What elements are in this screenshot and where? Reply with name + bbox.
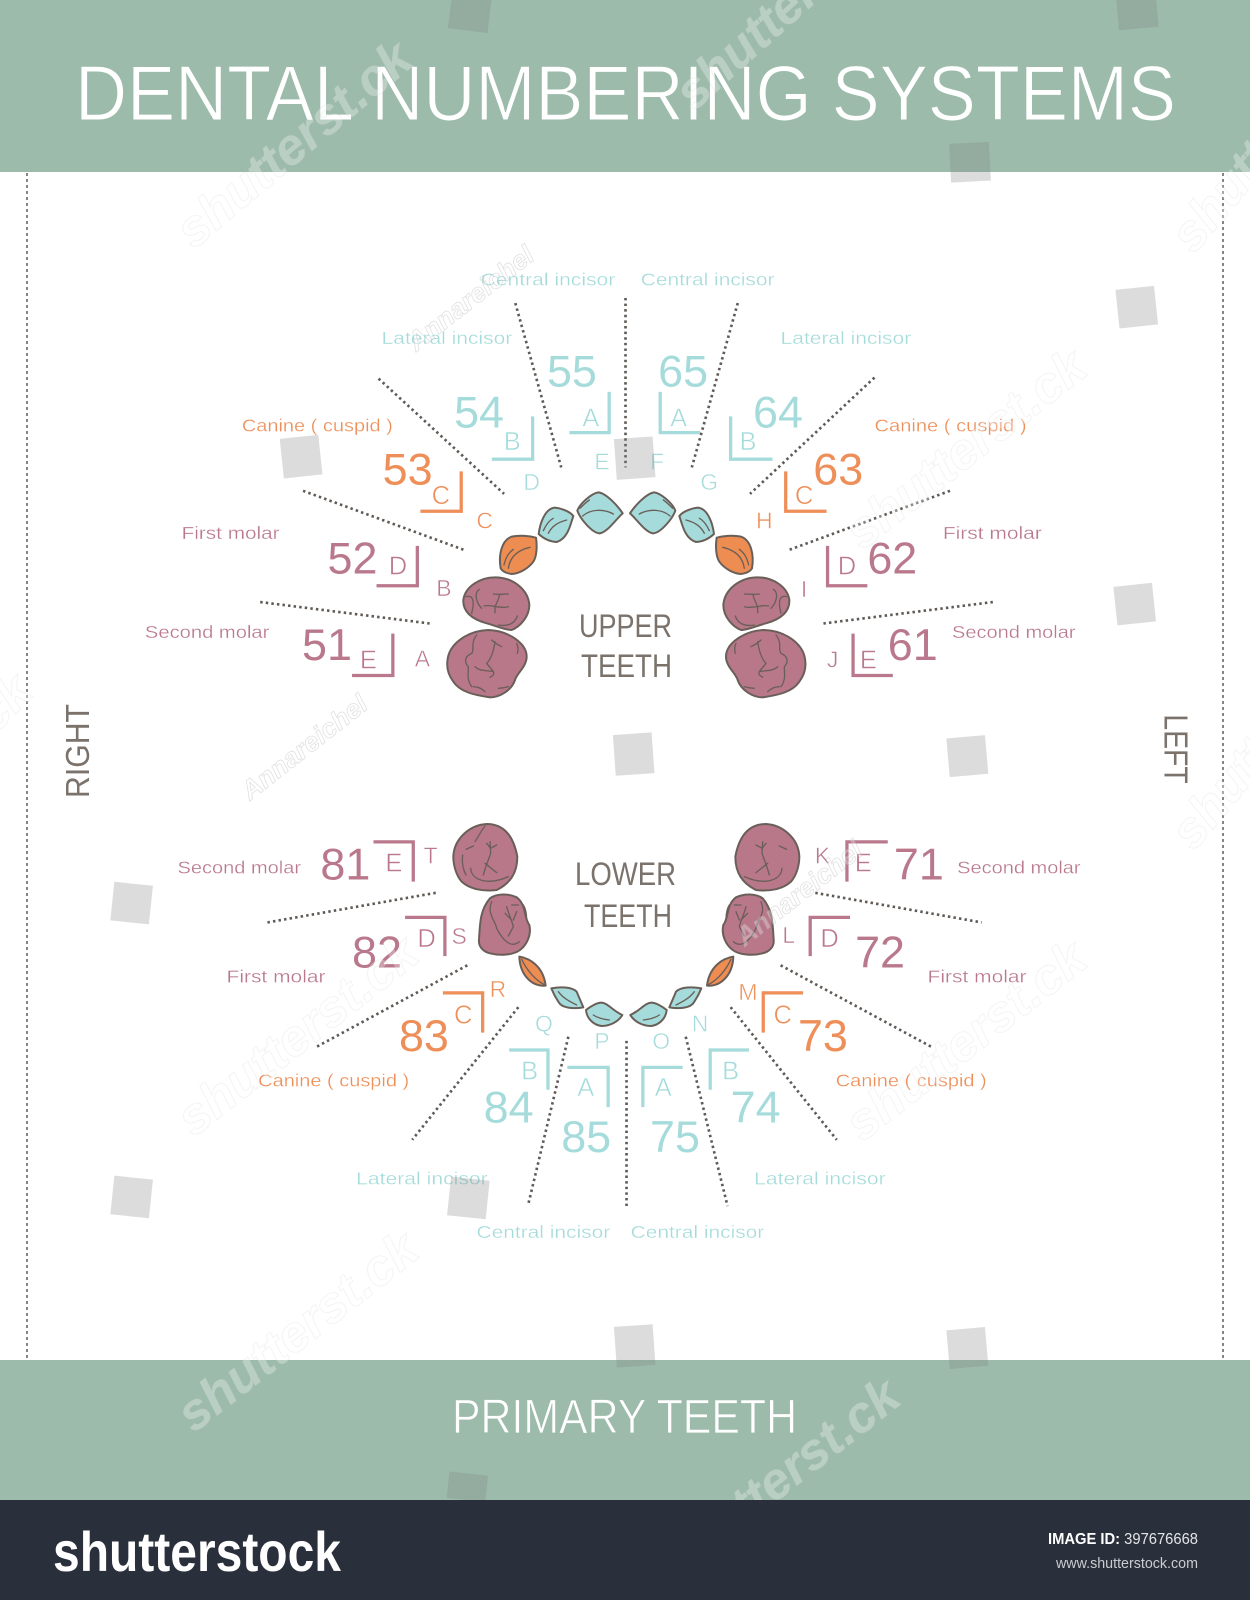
FDI numbers: lower: 74 [731,1081,781,1132]
tooth: upper second molar A [447,630,527,697]
bracket letters: B [722,1058,739,1086]
tooth name labels: upper: Central incisor [481,270,615,290]
bracket letters: D [389,552,407,580]
bracket letters: E [860,646,877,674]
tooth name labels: lower: First molar [928,967,1027,987]
footer logo: shutterstock [53,1520,342,1583]
heading: upper teeth: UPPER [579,608,672,644]
universal letters: J [827,646,838,672]
tooth name labels: upper: Canine ( cuspid ) [874,416,1027,436]
tooth name labels: upper: Canine ( cuspid ) [242,416,393,436]
universal letters: C [476,508,493,534]
upper left teeth [630,492,805,697]
bracket letters: A [655,1074,672,1102]
tooth: lower first molar S [479,894,530,955]
bracket letters: E [360,646,377,674]
bracket letters: C [795,482,813,510]
dotted leader lines [260,298,993,1208]
universal letters: S [452,923,467,949]
tooth name labels: lower: Lateral incisor [356,1169,488,1189]
heading: upper teeth [579,608,672,684]
universal letters: I [801,576,807,602]
tooth name labels: upper: Second molar [145,622,269,642]
tooth: upper lateral incisor D [539,508,573,542]
tooth: lower central incisor P [586,1003,622,1026]
stock watermarks: shutterst.ck [166,922,431,1146]
tooth: lower first molar L [723,894,774,955]
bracket letters: E [855,849,872,877]
tooth: lower canine M [707,957,733,986]
tooth name labels: upper: First molar [182,523,280,543]
tooth name labels: lower: Second molar [957,857,1081,877]
bracket letters: B [521,1058,538,1086]
stock watermarks: shutterst.ck [834,927,1099,1152]
universal letters [415,448,838,1054]
bracket letters [360,405,877,1102]
bracket letters: C [432,482,450,510]
FDI numbers: upper: 62 [867,532,917,583]
tooth name labels: upper: Lateral incisor [382,328,512,348]
tooth: upper central incisor F [630,492,675,533]
tooth name labels: lower: Lateral incisor [754,1169,886,1189]
stock watermarks: shutterst.ck [834,335,1099,560]
tooth: lower canine R [519,957,546,986]
FDI numbers: lower: 71 [894,839,944,890]
FDI numbers: upper [302,346,938,670]
tooth: lower lateral incisor Q [551,987,583,1008]
FDI numbers: upper: 64 [753,387,803,438]
side label: left: LEFT [1156,714,1193,784]
stock watermarks: shutterst.ck [164,27,424,258]
footer url: www.shutterstock.com [1055,1555,1198,1572]
upper arch [447,492,805,697]
bracket letters: A [670,405,687,433]
footer bar [0,1500,1250,1600]
FDI numbers: lower: 72 [855,926,905,977]
stock watermarks: shutterst.ck [647,1365,912,1589]
tooth: lower lateral incisor N [669,987,701,1008]
FDI numbers: lower: 73 [798,1010,848,1061]
universal letters: G [700,469,718,495]
image id: IMAGE ID: 397676668 [1048,1531,1198,1548]
stock watermarks: shutterst.ck [166,1218,431,1442]
tooth name labels: lower: Central incisor [631,1222,764,1242]
heading: upper teeth: TEETH [581,648,672,684]
universal letters: A [415,645,431,671]
bracket letters: C [454,1001,472,1029]
header band [0,0,1250,172]
universal letters: Q [535,1011,553,1037]
tooth name labels: upper: Lateral incisor [781,328,911,348]
side label: right: RIGHT [60,704,97,798]
heading: lower teeth: LOWER [575,856,676,892]
tooth: upper canine H [716,536,753,574]
tooth name labels: lower: Canine ( cuspid ) [258,1071,409,1091]
tooth: lower central incisor O [630,1003,667,1026]
FDI numbers: lower: 85 [561,1111,611,1162]
FDI numbers: lower: 75 [650,1111,700,1162]
lower right teeth [453,824,622,1026]
FDI numbers: upper: 61 [888,619,938,670]
universal letters: O [652,1028,670,1054]
bracket letters: D [838,552,856,580]
bracket letters: D [417,925,436,953]
tooth name labels: lower: Central incisor [477,1222,610,1242]
FDI numbers: upper: 52 [328,532,377,583]
upper right teeth [447,492,623,697]
FDI numbers: lower: 82 [352,926,402,977]
FDI numbers: lower: 81 [320,839,370,890]
tooth name labels: upper: Second molar [952,622,1076,642]
side dividers [27,173,1223,1359]
FDI numbers: lower: 83 [399,1010,449,1061]
heading: lower teeth [575,856,676,934]
tooth: lower second molar K [735,824,799,891]
stock watermarks: Annareichel [234,688,374,806]
bracket letters: A [577,1074,594,1102]
FDI numbers: lower: 84 [484,1081,534,1132]
universal letters: F [650,448,664,474]
FDI numbers: upper: 63 [813,444,863,495]
heading: lower teeth: TEETH [584,898,672,934]
bracket letters: A [582,405,599,433]
tooth: upper first molar I [723,577,789,630]
FDI numbers: upper: 54 [454,387,504,438]
FDI numbers: upper: 55 [547,346,597,397]
stock watermarks: Annareichel [401,239,540,357]
bracket letters: B [739,428,756,456]
lower arch [453,824,799,1026]
bracket letters: C [773,1001,792,1029]
universal letters: K [815,842,831,868]
bracket letters: D [820,925,839,953]
universal letters: T [424,842,438,868]
FDI numbers: upper: 65 [658,346,708,397]
FDI numbers: upper: 53 [383,444,433,495]
universal letters: R [490,976,506,1002]
bracket letters: E [385,849,402,877]
tooth name labels: lower: First molar [227,967,326,987]
universal letters: M [738,979,758,1005]
title: DENTAL NUMBERING SYSTEMS [75,49,1176,137]
bottom band [0,1360,1250,1500]
lower left teeth [630,824,799,1026]
universal letters: D [523,469,540,495]
tooth: upper canine C [500,536,537,574]
tooth: lower second molar T [453,824,517,891]
tooth name labels: lower: Canine ( cuspid ) [836,1071,987,1091]
tooth: upper lateral incisor G [679,508,714,542]
tooth name labels: upper: Central incisor [641,270,775,290]
universal letters: L [782,922,795,948]
tooth name labels: lower: Second molar [178,857,301,877]
display coordinate content [60,270,1193,1242]
universal letters: H [756,508,773,534]
FDI numbers: upper: 51 [302,619,352,670]
universal letters: N [692,1011,708,1037]
universal letters: E [594,448,610,474]
subtitle: primary teeth: PRIMARY TEETH [452,1391,797,1444]
universal letters: B [436,575,452,601]
bracket letters: B [504,428,521,456]
universal letters: P [594,1028,610,1054]
tooth: upper central incisor E [577,492,623,533]
FDI numbers: lower [320,839,944,1162]
tooth name labels: upper: First molar [943,523,1042,543]
tooth: upper first molar B [463,577,529,630]
tooth: upper second molar J [726,630,805,697]
tooth name labels: upper [145,270,1076,642]
stock watermarks: Annareichel [729,834,869,952]
tooth name labels: lower [178,857,1081,1242]
palmer brackets [352,392,893,1107]
